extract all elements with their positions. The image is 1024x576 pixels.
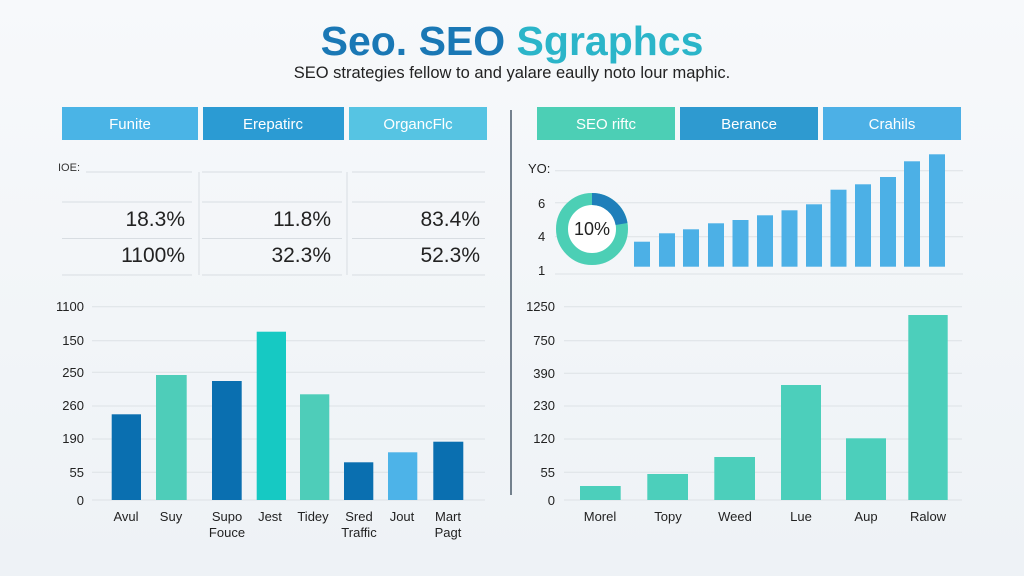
- bottom-left bar chart: 150: [62, 333, 84, 348]
- table: metrics: 1100%: [121, 244, 185, 267]
- table: metrics: 52.3%: [420, 244, 480, 267]
- bottom-left bar chart: Suy: [160, 509, 183, 524]
- bottom-left bar chart: Mart: [435, 509, 461, 524]
- bottom-left bar chart: 190: [62, 431, 84, 446]
- bottom-right bar chart: Lue: [790, 509, 812, 524]
- bottom-right bar chart: 1250: [526, 299, 555, 314]
- bottom-right bar chart: 55: [541, 465, 555, 480]
- subtitle: SEO strategies fellow to and yalare eaully noto lour maphic.: [294, 64, 730, 82]
- bottom-left bar chart: 250: [62, 365, 84, 380]
- title: Seo. SEO Sgraphcs: [321, 18, 703, 64]
- bottom-right bar chart: 230: [533, 398, 555, 413]
- bottom-left bar chart: 260: [62, 398, 84, 413]
- bottom-left bar chart: 55: [70, 465, 84, 480]
- bottom-left bar chart: Tidey: [297, 509, 329, 524]
- header tabs: right: SEO riftc: [576, 116, 636, 133]
- header tabs: left: [62, 107, 487, 140]
- top-right chart with donut: 4: [538, 229, 545, 244]
- bottom-left bar chart: Avul: [113, 509, 139, 524]
- table: metrics: IOE:: [58, 162, 80, 174]
- bottom-right bar chart: [526, 299, 962, 524]
- header tabs: left: Erepatirc: [243, 116, 304, 133]
- top-right chart with donut: YO:: [528, 161, 550, 176]
- bottom-left bar chart: Jout: [390, 509, 415, 524]
- bottom-right bar chart: Ralow: [910, 509, 947, 524]
- bottom-right bar chart: Morel: [584, 509, 616, 524]
- top-right chart with donut: 1: [538, 263, 545, 278]
- table: metrics: 11.8%: [273, 208, 331, 231]
- header tabs: right: [537, 107, 961, 140]
- donut: 10%: 10%: [574, 219, 610, 239]
- header tabs: right: Berance: [721, 116, 777, 133]
- donut: 10%: [562, 199, 622, 259]
- table: metrics: [58, 162, 485, 275]
- bottom-left bar chart: [56, 299, 485, 540]
- bottom-left bar chart: Fouce: [209, 525, 245, 540]
- top-right chart with donut: 6: [538, 196, 545, 211]
- header tabs: right: Crahils: [869, 116, 915, 133]
- bottom-right bar chart: Weed: [718, 509, 752, 524]
- table: metrics: 83.4%: [420, 208, 480, 231]
- table: metrics: 32.3%: [271, 244, 331, 267]
- bottom-right bar chart: Aup: [854, 509, 878, 524]
- header tabs: left: Funite: [109, 116, 151, 133]
- bottom-left bar chart: 0: [77, 493, 84, 508]
- bottom-right bar chart: 750: [533, 333, 555, 348]
- bottom-right bar chart: Topy: [654, 509, 682, 524]
- bottom-left bar chart: Supo: [212, 509, 242, 524]
- bottom-right bar chart: 120: [533, 431, 555, 446]
- bottom-left bar chart: Traffic: [341, 525, 377, 540]
- bottom-left bar chart: Sred: [345, 509, 373, 524]
- table: metrics: 18.3%: [125, 208, 185, 231]
- top-right chart with donut: [528, 154, 963, 278]
- bottom-left bar chart: Pagt: [435, 525, 462, 540]
- header tabs: left: OrgancFlc: [383, 116, 453, 133]
- bottom-left bar chart: 1100: [56, 299, 84, 314]
- bottom-right bar chart: 390: [533, 366, 555, 381]
- bottom-right bar chart: 0: [548, 493, 555, 508]
- bottom-left bar chart: Jest: [258, 509, 282, 524]
